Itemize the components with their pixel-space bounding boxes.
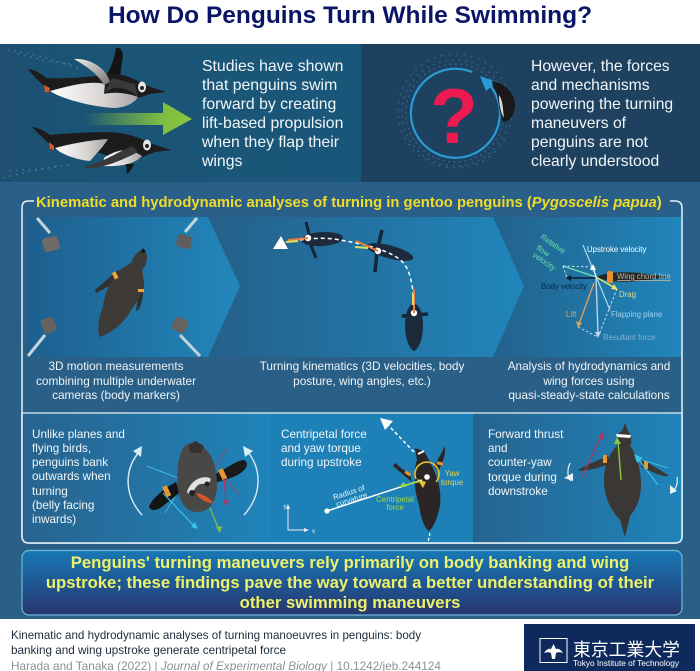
icon: penguin head-on banking — [147, 441, 247, 533]
text: studies: forward by creating — [202, 96, 336, 113]
caption: hydrodynamics: Analysis of hydrodynamics and — [508, 359, 670, 373]
text: banking: inwards) — [32, 513, 76, 526]
wing force diagram — [531, 232, 671, 342]
text: studies: that penguins swim — [202, 77, 337, 94]
wing force diagram: Upstroke velocity — [587, 245, 646, 254]
icon: penguin from above — [492, 81, 515, 122]
panel: banking — [22, 413, 270, 543]
panel: centripetal force — [270, 413, 473, 543]
axes — [284, 504, 315, 535]
caption: hydrodynamics: quasi-steady-state calculations — [508, 388, 670, 402]
panel: analyses background — [0, 182, 700, 619]
logo english: Tokyo Institute of Technology — [573, 658, 680, 668]
caption: hydrodynamics: wing forces using — [542, 374, 635, 388]
text: centripetal: during upstroke — [281, 456, 362, 469]
text: thrust: counter-yaw — [488, 456, 552, 469]
dotted halo — [398, 54, 512, 168]
label: yaw torque: Yaw — [445, 469, 460, 478]
icon: question mark: ? — [430, 72, 478, 160]
logo mark — [540, 638, 567, 662]
panel: first analysis step — [27, 217, 240, 357]
icon: penguin from above with forces — [393, 446, 445, 542]
wing force diagram: Flapping plane — [611, 310, 662, 319]
text: however: and mechanisms — [531, 77, 650, 94]
heading: analyses: Kinematic and hydrodynamic analyses of turning in gentoo penguins (Pygoscelis papua) — [36, 195, 662, 211]
caption: 3D motion: 3D motion measurements — [48, 359, 184, 373]
conclusion text: upstroke; these findings pave the way toward a better understanding of their — [46, 573, 655, 592]
panel: forward thrust — [473, 413, 682, 543]
text: banking: penguins bank — [32, 456, 108, 469]
icon: camera top right — [175, 218, 197, 250]
text: centripetal: and yaw torque — [281, 442, 361, 455]
wing force diagram: Wing chord line — [617, 272, 671, 281]
logo wordmark: 東京工業大学 — [573, 640, 680, 660]
arrows: wing motion — [568, 463, 677, 492]
wing force diagram: velocity — [531, 250, 557, 273]
icon: camera bottom left — [28, 316, 58, 356]
text: however: However, the forces — [531, 58, 670, 75]
text: thrust: and — [488, 442, 508, 455]
radius of curvature line — [324, 480, 422, 514]
logo: Tokyo Institute of Technology — [524, 624, 695, 671]
frame redraw — [22, 413, 682, 543]
icon: penguin with wing down — [32, 127, 171, 174]
wing force diagram: Drag — [619, 290, 636, 299]
bubbles: upper left — [8, 50, 78, 68]
conclusion text: Penguins' turning maneuvers rely primarily on body banking and wing — [71, 553, 629, 572]
icon: camera top left — [37, 218, 61, 253]
label: centripetal force: Centripetal — [376, 495, 414, 504]
icon: turning circle arrow — [411, 69, 500, 158]
icon: camera bottom right — [171, 316, 200, 356]
wing force diagram: flow — [535, 243, 552, 259]
text: banking: flying birds, — [32, 442, 91, 455]
text: thrust: torque during — [488, 471, 557, 484]
text: banking: (belly facing — [32, 499, 94, 512]
text: banking: outwards when — [32, 470, 111, 483]
wing force diagram: Relative — [539, 232, 567, 256]
text: however: maneuvers of — [531, 115, 627, 132]
panel: what is unknown — [361, 44, 700, 182]
title: How Do Penguins Turn While Swimming? — [108, 2, 592, 29]
icon: penguin from behind — [578, 423, 668, 537]
text: centripetal: Centripetal force — [281, 428, 367, 441]
text: banking: Unlike planes and — [32, 428, 125, 441]
text: however: clearly understood — [531, 153, 659, 170]
citation title: Kinematic and hydrodynamic analyses of turning manoeuvres in penguins: body — [11, 628, 421, 642]
caption: 3D motion: cameras (body markers) — [52, 388, 180, 402]
panel: third analysis step — [493, 217, 682, 357]
axes: x — [312, 529, 315, 535]
caption: kinematics: posture, wing angles, etc.) — [293, 374, 431, 388]
text: studies: wings — [201, 153, 242, 170]
label: centripetal force: force — [386, 503, 404, 512]
text: studies: lift-based propulsion — [202, 115, 343, 132]
text: however: penguins are not — [531, 134, 649, 151]
bubbles: lower left — [4, 165, 70, 178]
radius of curvature line: curvature — [335, 490, 369, 509]
citation title line 2: banking and wing upstroke generate centripetal force — [11, 643, 286, 657]
radius of curvature line: Radius of — [332, 483, 367, 502]
text: thrust: downstroke — [488, 485, 548, 498]
caption: kinematics: Turning kinematics (3D velocities, body — [260, 359, 464, 373]
axes: y — [284, 504, 286, 510]
caption: 3D motion: combining multiple underwater — [36, 374, 196, 388]
arrows: banking direction — [128, 452, 258, 515]
white frame top rule — [22, 412, 682, 414]
text: studies: Studies have shown — [202, 58, 343, 75]
icon: penguin with body markers — [95, 248, 147, 337]
conclusion text: other swimming maneuvers — [240, 593, 460, 612]
panel: what is known — [0, 44, 361, 182]
arrow: swim direction — [380, 418, 414, 452]
panel frame — [22, 201, 682, 543]
text: banking: turning — [32, 485, 68, 498]
panel: second analysis step — [208, 217, 524, 357]
wing force diagram: Body velocity — [541, 282, 587, 291]
text: thrust: Forward thrust — [488, 428, 564, 441]
footer — [0, 619, 700, 671]
label: yaw torque: torque — [441, 478, 463, 487]
icon: penguin with wing up — [28, 48, 166, 108]
wing force diagram: Lift — [566, 310, 577, 319]
wing force diagram: Resultant force — [603, 333, 655, 342]
arrowheads — [133, 446, 253, 457]
text: however: powering the turning — [531, 96, 673, 113]
text: studies: when they flap their — [201, 134, 339, 151]
conclusion box — [22, 550, 682, 615]
arrow: forward motion — [85, 102, 192, 135]
arrowheads — [564, 473, 677, 494]
swim path with three penguin poses — [273, 222, 428, 351]
